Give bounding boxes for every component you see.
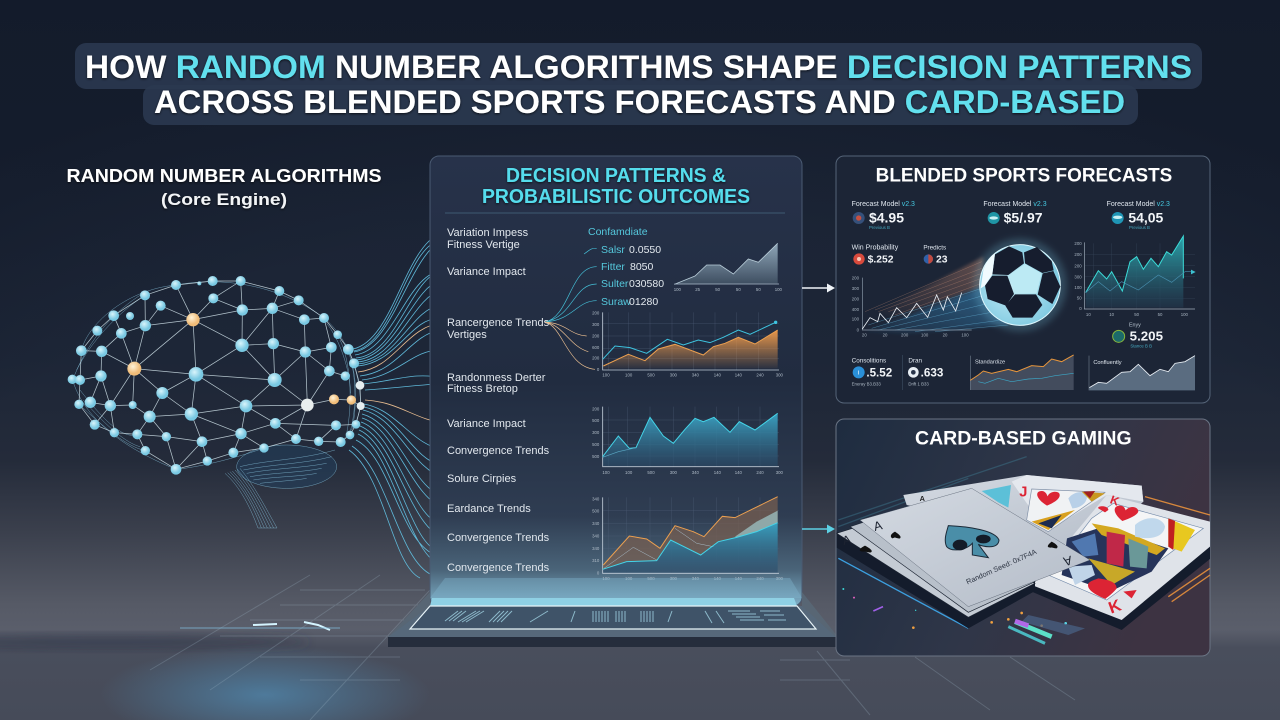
line chart: blue area: 240 [756,470,764,475]
title: HOW RANDOM NUMBER ALGORITHMS SHAPE DECISION PATTERNS [85,49,1192,85]
line chart: cyan and orange: 300 [776,373,784,378]
card: king of hearts: K [1108,493,1121,509]
line chart: layered area: 340 [692,576,700,581]
left zigzag chart: 20 [862,332,867,337]
predicted stat: 23 [936,255,948,266]
small area chart: 100 [775,287,783,292]
line chart: layered area: 340 [592,546,600,551]
mini chart: grey [1089,356,1195,390]
stats list: Sulter [601,278,629,290]
stat: bottom left: Eneray B3.B33 [852,382,881,387]
card: ace stack: A [1061,553,1074,569]
line chart: layered area: 500 [647,576,655,581]
line chart: cyan and orange: 200 [592,356,600,361]
line chart: layered area: 340 [592,521,600,526]
panel heading [482,165,750,208]
title [75,43,1202,125]
line chart: blue area: 500 [647,470,655,475]
predicted stat: Predicts [923,245,946,252]
small area chart: 50 [736,287,741,292]
right area chart: 50 [1134,312,1140,317]
left zigzag chart: 100 [852,317,860,322]
forecast stat 1: $4.95 [869,210,904,226]
line chart: cyan and orange: 100 [602,373,610,378]
card: ace stack: A [841,532,853,548]
panel: blended sports forecasts [836,156,1210,403]
left heading: random number algorithms: (Core Engine) [161,190,287,209]
line chart: cyan and orange: 240 [756,373,764,378]
forecast stat 3: Forecast Model v2.3 [1107,201,1170,208]
arrow: to card gaming [802,524,835,534]
left zigzag chart [852,275,972,337]
stat: bottom left: .5.52 [866,367,893,380]
line chart: blue area: 300 [592,430,600,435]
right area chart: 50 [1077,295,1082,300]
forecast stat 3: Previous B [1129,225,1150,230]
forecast stat 3: 54,05 [1128,210,1164,226]
panel: card-based gaming [836,419,1210,656]
left zigzag chart: 0 [857,327,860,332]
right area chart: 200 [1074,264,1082,269]
ball trail [865,257,1008,333]
left zigzag chart: 200 [852,275,860,280]
line chart: cyan and orange: 0 [597,367,600,372]
line chart: layered area: 300 [670,576,678,581]
forecast stat 1: Previous B [869,225,890,230]
left heading: random number algorithms [66,166,382,209]
line chart: layered area: 140 [714,576,722,581]
line chart: cyan and orange: 600 [592,345,600,350]
line chart: blue area: 340 [692,470,700,475]
left zigzag chart: 300 [852,286,860,291]
line chart: layered area: 0 [597,570,600,575]
decorative light streaks [838,457,1210,628]
card: ace stack: Random Seed: 0x7F4A [965,547,1038,586]
left label list: Vertiges [447,329,487,341]
stat: bottom left: Consolitions [852,357,886,364]
panel heading: DECISION PATTERNS & [506,165,726,187]
stats list: Salsr [601,244,625,256]
left label list: Variance Impact [447,418,526,430]
stat: bottom left: i [858,370,860,377]
right area chart: 10 [1086,312,1091,317]
line chart: blue area: 140 [714,470,722,475]
brain network links [79,281,361,469]
line chart: blue area: 500 [592,418,600,423]
left zigzag chart: 100 [961,332,969,337]
line chart: cyan and orange: 300 [592,322,600,327]
line chart: cyan and orange: 340 [692,373,700,378]
left zigzag chart: 100 [921,332,929,337]
icon: soccer ball [973,238,1067,332]
line chart: layered area: 100 [602,576,610,581]
line chart: cyan and orange: 100 [625,373,633,378]
line chart: layered area: 240 [756,576,764,581]
win probability stat [852,245,899,266]
card: ace stack [837,488,1090,628]
left heading: random number algorithms: RANDOM NUMBER ALGORITHMS [66,166,382,186]
line chart: layered area [592,496,784,581]
stat: right lower: Enyy [1129,322,1141,328]
stats list: 0.0550 [629,244,661,256]
card: back ace [903,475,1143,555]
left zigzag chart: 20 [943,332,948,337]
panel: card-based gaming: A [920,494,926,503]
right area chart: 200 [1074,241,1082,246]
card: queen of hearts: J [1019,485,1027,501]
line chart: layered area: 100 [625,576,633,581]
line chart: blue area: 500 [592,454,600,459]
left label list: Randonmess Derter [447,372,546,384]
stat: bottom left [852,357,893,387]
left label list: Convergence Trends [447,562,550,574]
forecast stat 2 [983,201,1047,226]
panel heading: CARD-BASED GAMING [915,428,1132,449]
small area chart: 50 [715,287,721,292]
right area chart [1074,236,1196,317]
left zigzag chart: 20 [883,332,888,337]
small area chart: 25 [695,287,701,292]
stats list: 030580 [629,278,664,290]
line chart: cyan and orange: 500 [647,373,655,378]
line chart: blue area: 300 [670,470,678,475]
panel heading: BLENDED SPORTS FORECASTS [876,166,1172,187]
line chart: cyan and orange: 200 [592,310,600,315]
line chart: layered area: 300 [776,576,784,581]
small area chart [674,243,783,292]
card: queen of hearts [1012,475,1143,532]
forecast stat 1: Forecast Model v2.3 [852,201,915,208]
win probability stat: $.252 [868,255,894,266]
line chart: blue area: 300 [776,470,784,475]
right area chart: 300 [1074,274,1082,279]
arrow: to sports forecasts [802,284,835,292]
stats list: 01280 [629,296,658,308]
line chart: layered area: 340 [592,534,600,539]
left zigzag chart: 200 [852,297,860,302]
line chart: layered area: 500 [592,509,600,514]
stat: bottom middle [903,355,944,390]
mini chart: orange [970,355,1074,390]
left label list: Rancergence Trends [447,317,550,329]
title: ACROSS BLENDED SPORTS FORECASTS AND CARD-BASED [154,84,1125,120]
line chart: blue area: 200 [592,407,600,412]
line chart: blue area: 100 [602,470,610,475]
stats connector lines [545,248,597,369]
line chart: layered area: 310 [592,558,600,563]
glowing dots and bars [842,588,1085,643]
stats list: Suraw [601,296,631,308]
right area chart: 10 [1109,312,1115,317]
card: king of hearts: K [1106,596,1124,617]
left label list: Convergence Trends [447,532,550,544]
stat: right lower [1113,322,1164,348]
forecast stat 2: $5/.97 [1004,210,1043,226]
line chart: cyan and orange: 300 [670,373,678,378]
line chart: cyan and orange: 200 [592,334,600,339]
left label list: Fitness Vertige [447,239,520,251]
left label list: Eardance Trends [447,503,531,515]
small area chart: 50 [756,287,761,292]
line chart: blue area: 100 [625,470,633,475]
laptop base [388,578,838,647]
brain highlighted nodes [127,313,356,405]
left zigzag chart: 400 [852,307,860,312]
forecast stat 2: Forecast Model v2.3 [983,201,1047,208]
forecast stat 1 [852,201,915,230]
forecast stat 3 [1107,201,1170,230]
line chart: cyan and orange: 140 [714,373,722,378]
left label list [447,227,550,574]
stat: bottom middle: Dran [908,357,923,364]
brain nodes [68,276,365,475]
left label list: Variation Impess [447,227,529,239]
right area chart: 50 [1158,312,1163,317]
stat: bottom middle: .633 [921,367,944,380]
icon: neural network brain [68,276,365,528]
brain lower mesh and stem [72,282,361,528]
stats list: Confamdiate [588,226,648,238]
panel: decision patterns and probabilistic outcomes [430,156,802,606]
right area chart: 100 [1181,312,1189,317]
stats list: Fitter [601,261,625,273]
line chart: blue area: 500 [592,442,600,447]
predicted stat [923,245,948,266]
right area chart: 200 [1074,252,1082,257]
left zigzag chart: 200 [901,332,909,337]
stat: right lower: Stance B B [1130,343,1152,348]
card: king of hearts [1032,493,1210,630]
panel heading: PROBABILISTIC OUTCOMES [482,186,750,208]
card: ace stack: A [872,518,884,534]
left label list: Variance Impact [447,266,526,278]
mini chart: grey: Confluently [1093,360,1122,366]
stats list [588,226,664,308]
left label list: Convergence Trends [447,445,550,457]
line chart: blue area [592,407,784,475]
right area chart: 0 [1079,306,1082,311]
left label list: Fitness Bretop [447,383,518,395]
line chart: cyan and orange [592,310,784,378]
win probability stat: Win Probability [852,245,899,252]
stats list: 8050 [630,261,654,273]
line chart: blue area: 140 [735,470,743,475]
small area chart: 100 [674,287,682,292]
stat: right lower: 5.205 [1130,329,1164,344]
line chart: layered area: 340 [592,496,600,501]
right area chart: 100 [1074,285,1082,290]
ace spade pip [945,526,999,558]
left label list: Solure Cirpies [447,473,517,485]
stat: bottom middle: Drift 1 B33 [908,382,929,387]
line chart: layered area: 140 [735,576,743,581]
flow lines from brain to labels [349,232,445,578]
mini chart: orange: Standardize [975,359,1005,365]
line chart: cyan and orange: 140 [735,373,743,378]
